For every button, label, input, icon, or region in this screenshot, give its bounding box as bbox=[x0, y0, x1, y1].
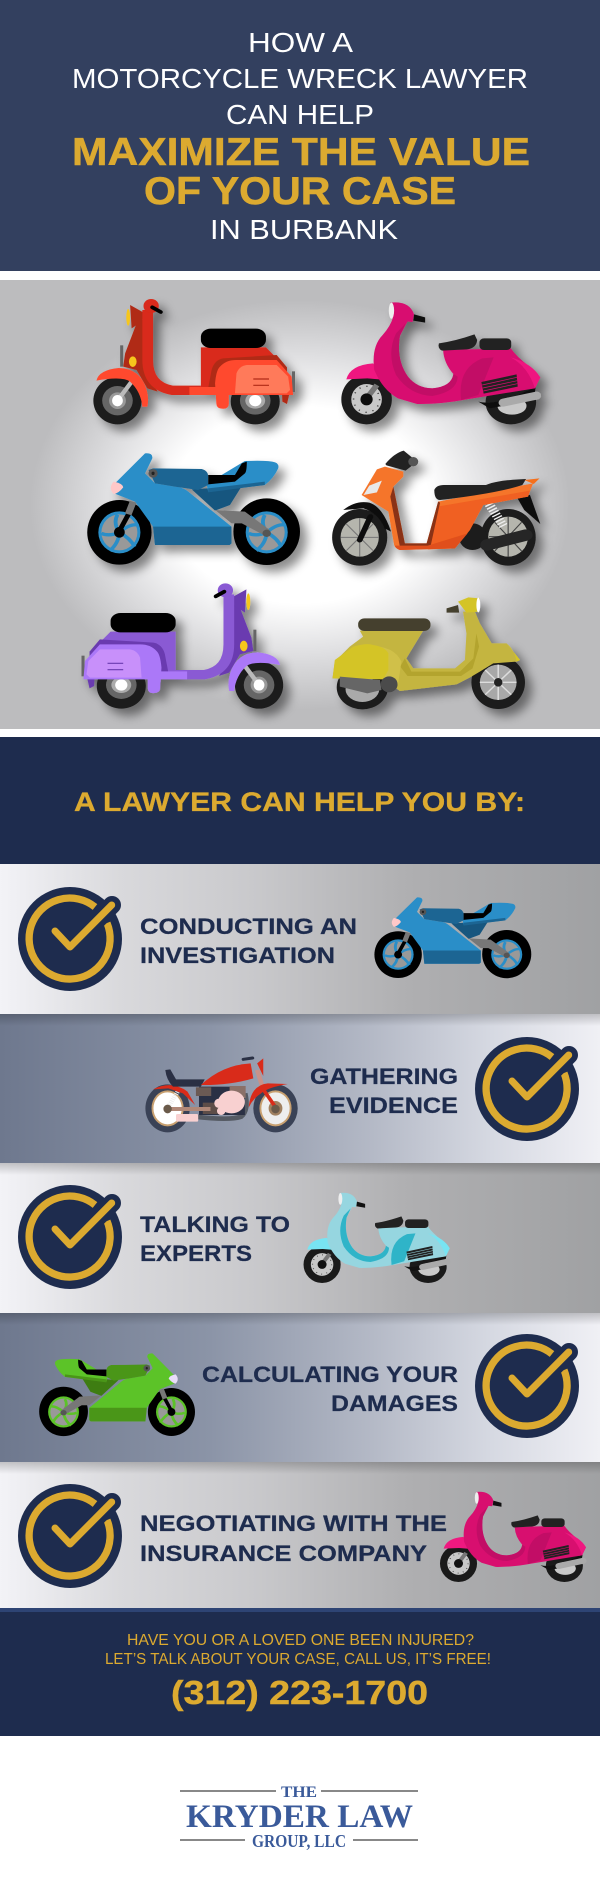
purple scooter bbox=[82, 583, 283, 709]
call to action text: HAVE YOU OR A LOVED ONE BEEN INJURED? bbox=[127, 1632, 474, 1649]
icon: check mark bbox=[475, 1037, 579, 1141]
icon: check mark bbox=[18, 1185, 122, 1289]
text: talking to experts: EXPERTS bbox=[140, 1241, 252, 1266]
row: gathering evidence bbox=[0, 1014, 600, 1163]
icon: check mark bbox=[475, 1334, 579, 1438]
row: talking to experts bbox=[0, 1163, 600, 1313]
text: conducting an investigation: CONDUCTING AN bbox=[140, 914, 357, 939]
text: calculating your damages: CALCULATING YOUR bbox=[202, 1362, 458, 1387]
text: talking to experts: TALKING TO bbox=[140, 1212, 290, 1237]
pink scooter bbox=[341, 302, 540, 424]
title highlight: of your case: OF YOUR CASE bbox=[144, 170, 456, 213]
row: conducting an investigation bbox=[0, 864, 600, 1014]
icon: teal scooter bbox=[304, 1193, 450, 1283]
header panel bbox=[0, 0, 600, 271]
logo: the kryder law group bbox=[180, 1784, 418, 1851]
title highlight: maximize the value: MAXIMIZE THE VALUE bbox=[72, 131, 530, 174]
logo: the kryder law group: GROUP, LLC bbox=[252, 1831, 346, 1851]
text: negotiating with the insurance company: NEGOTIATING WITH THE bbox=[140, 1511, 447, 1536]
icon: check mark bbox=[18, 887, 122, 991]
icon: blue motorcycle bbox=[374, 897, 531, 978]
yellow scooter bbox=[333, 597, 525, 709]
icon: check mark bbox=[18, 1484, 122, 1588]
title line: motorcycle wreck lawyer: MOTORCYCLE WRECK LAWYER bbox=[72, 63, 528, 94]
text: calculating your damages bbox=[202, 1362, 458, 1416]
title line: how a: HOW A bbox=[248, 27, 353, 58]
title line: can help: CAN HELP bbox=[226, 99, 374, 130]
icon: red cruiser motorcycle bbox=[145, 1058, 298, 1132]
text: gathering evidence: EVIDENCE bbox=[329, 1093, 458, 1118]
title line: in burbank: IN BURBANK bbox=[210, 214, 398, 245]
panel: call to action footer bbox=[0, 1608, 600, 1736]
phone number: (312) 223-1700 bbox=[171, 1674, 428, 1711]
blue sport motorcycle bbox=[87, 453, 300, 565]
panel: six scooters and motorcycles bbox=[0, 280, 600, 729]
panel: section heading band bbox=[0, 737, 600, 864]
orange scooter bbox=[332, 451, 540, 566]
icon: pink scooter bbox=[440, 1492, 586, 1582]
text: negotiating with the insurance company: INSURANCE COMPANY bbox=[140, 1541, 427, 1566]
text: gathering evidence bbox=[310, 1064, 458, 1118]
red scooter bbox=[93, 299, 295, 424]
text: negotiating with the insurance company bbox=[140, 1511, 447, 1566]
logo: the kryder law group: THE bbox=[281, 1784, 317, 1801]
text: conducting an investigation bbox=[140, 914, 357, 968]
text: gathering evidence: GATHERING bbox=[310, 1064, 458, 1089]
text: talking to experts bbox=[140, 1212, 290, 1266]
text: conducting an investigation: INVESTIGATION bbox=[140, 943, 335, 968]
row: calculating your damages bbox=[0, 1313, 600, 1462]
text: calculating your damages: DAMAGES bbox=[331, 1391, 458, 1416]
logo: the kryder law group: KRYDER LAW bbox=[186, 1799, 413, 1835]
row: negotiating with the insurance company bbox=[0, 1462, 600, 1608]
section heading: A LAWYER CAN HELP YOU BY: bbox=[74, 787, 525, 817]
call to action text bbox=[105, 1632, 491, 1668]
icon: green motorcycle bbox=[39, 1353, 195, 1436]
call to action text: LET’S TALK ABOUT YOUR CASE, CALL US, IT’S FREE! bbox=[105, 1651, 491, 1668]
